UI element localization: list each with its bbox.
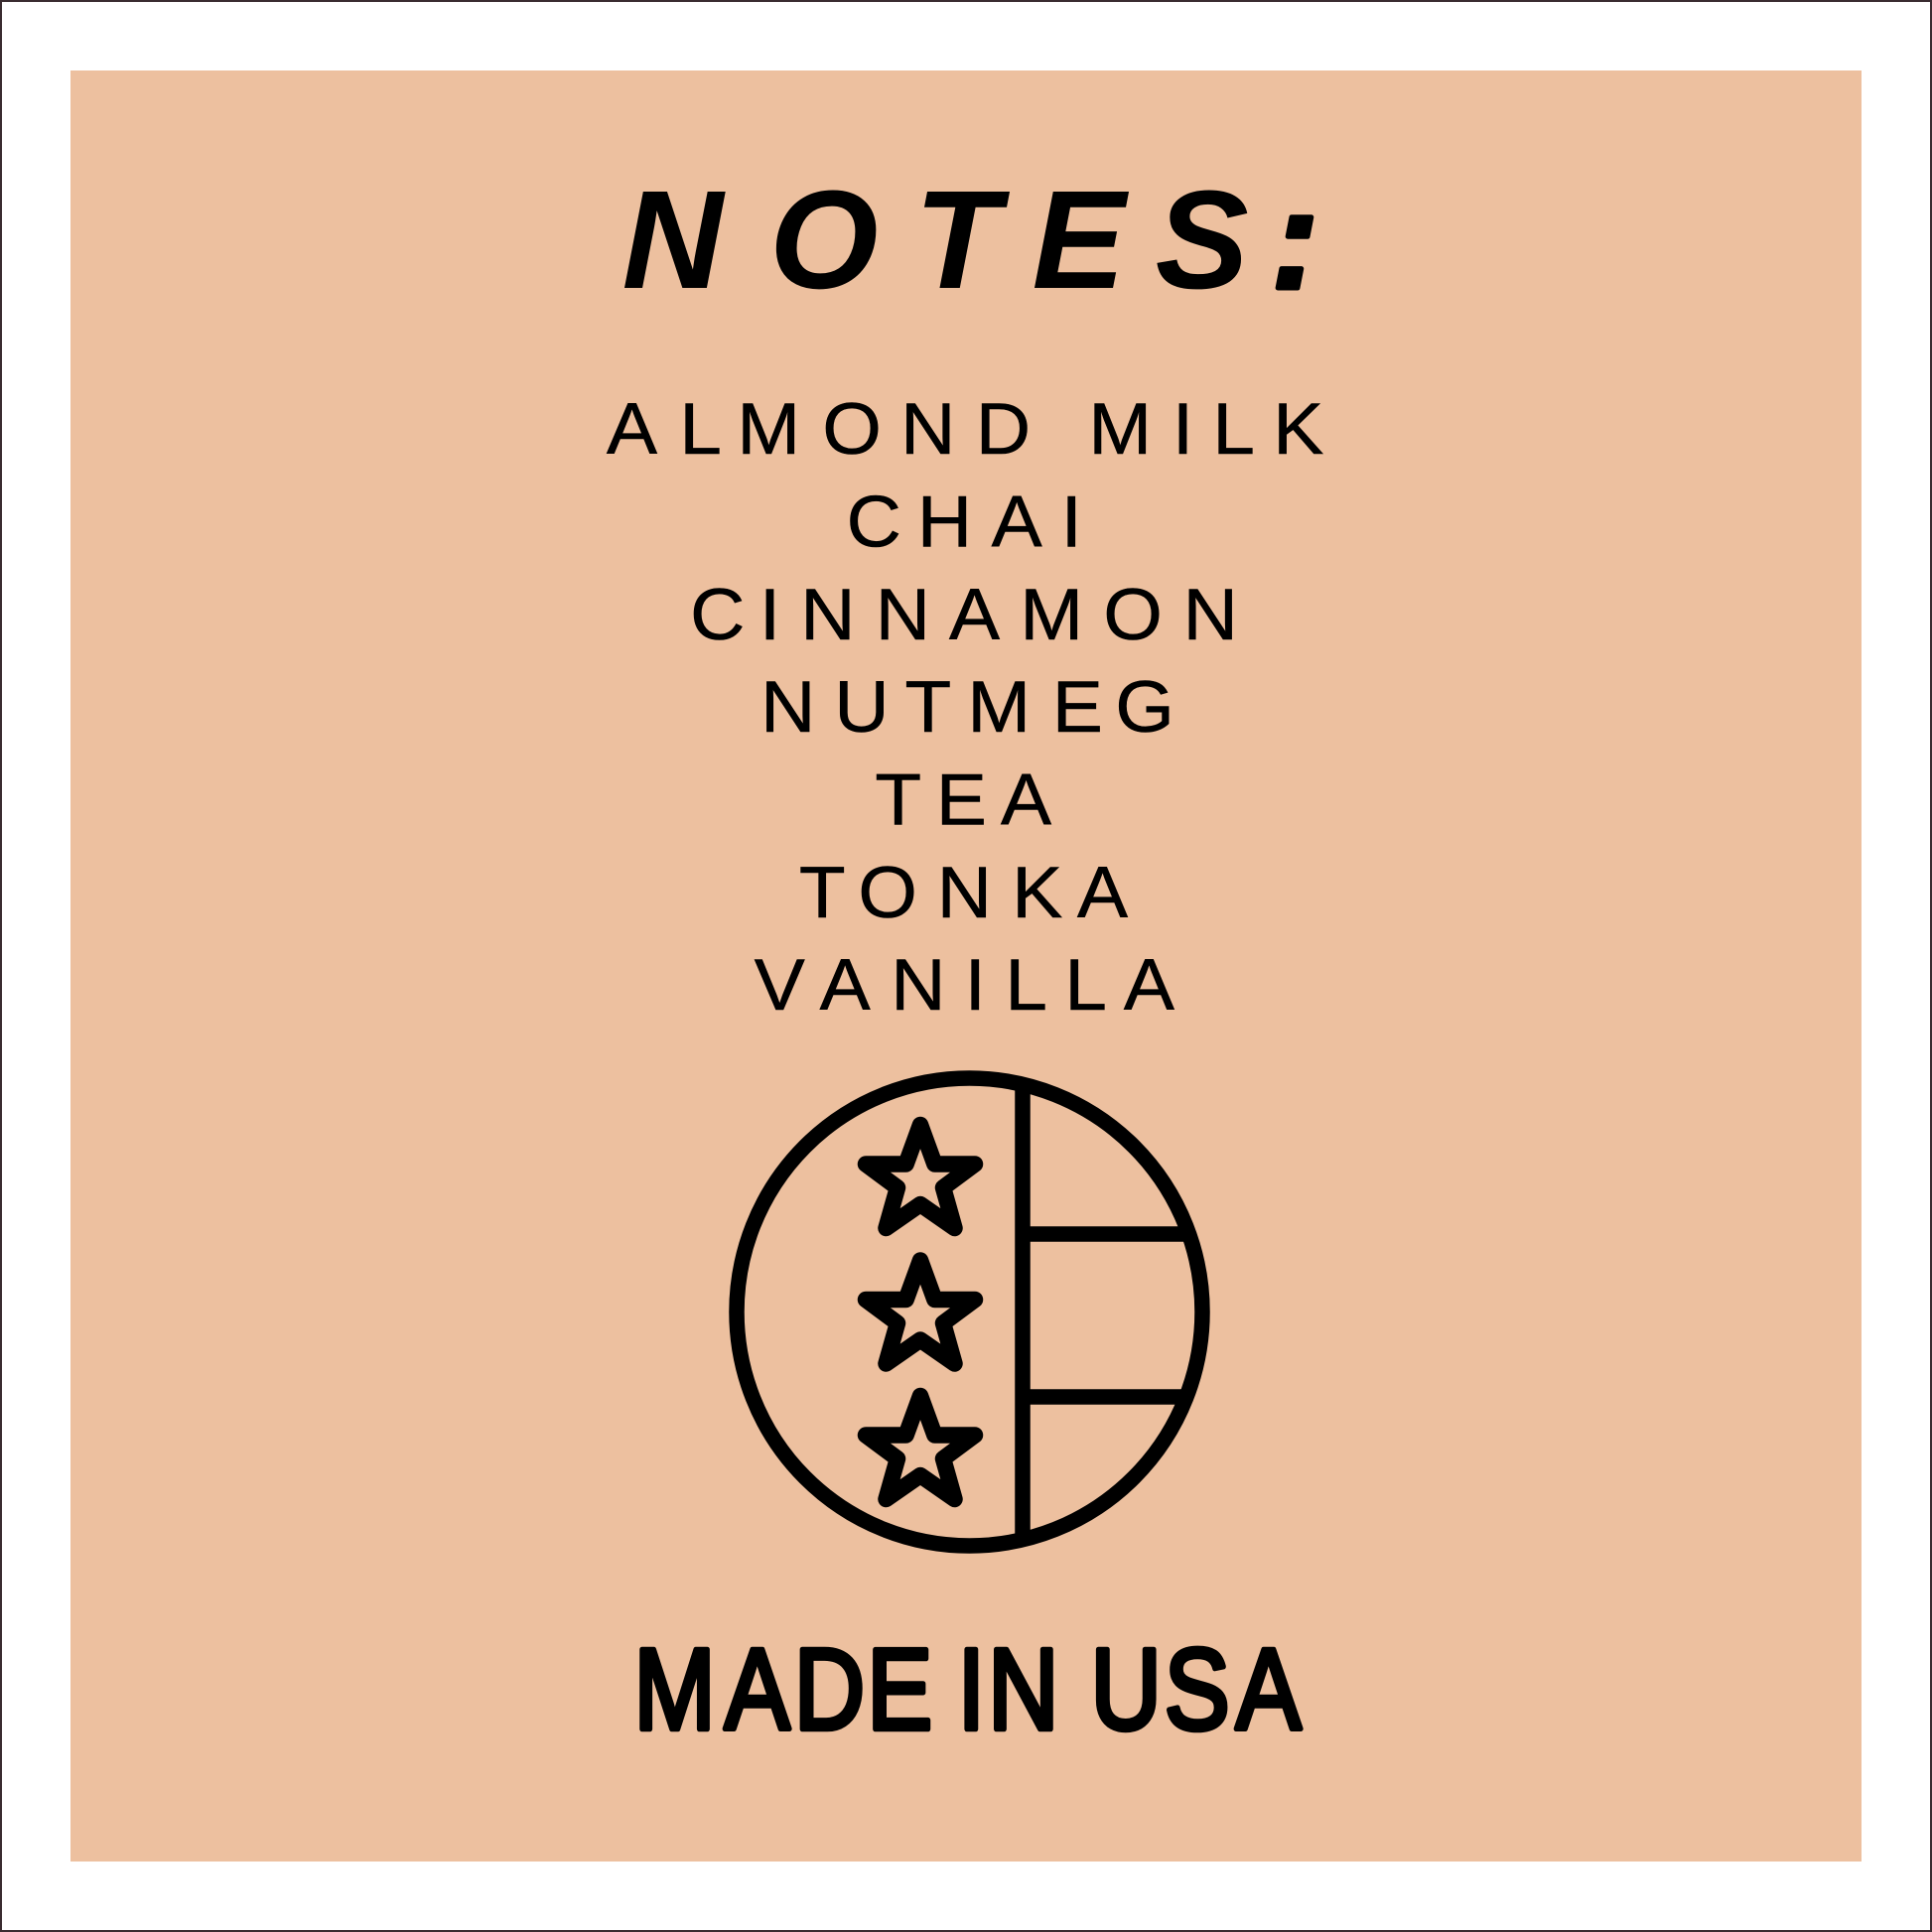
icon: bottom star (866, 1396, 975, 1499)
list of scent notes (607, 387, 1323, 1026)
note: chai: CHAI (847, 481, 1082, 562)
note: almond milk: ALMOND MILK (607, 387, 1323, 470)
note: cinnamon: CINNAMON (690, 573, 1238, 654)
icon: lower horizontal bar (1023, 1389, 1186, 1405)
icon: circle flag with three stars (737, 1078, 1202, 1546)
icon: middle star (866, 1261, 975, 1364)
title: NOTES (621, 161, 1249, 318)
made in usa label: MADE IN USA (634, 1625, 1302, 1753)
icon: upper horizontal bar (1023, 1226, 1189, 1242)
icon: circle outline (737, 1078, 1202, 1546)
note: nutmeg: NUTMEG (760, 665, 1174, 748)
icon: top star (866, 1125, 975, 1228)
title: : (1272, 161, 1318, 318)
icon: vertical divider (1015, 1085, 1031, 1539)
note: vanilla: VANILLA (755, 943, 1174, 1026)
note: tonka: TONKA (799, 851, 1128, 932)
note: tea: TEA (875, 759, 1051, 840)
